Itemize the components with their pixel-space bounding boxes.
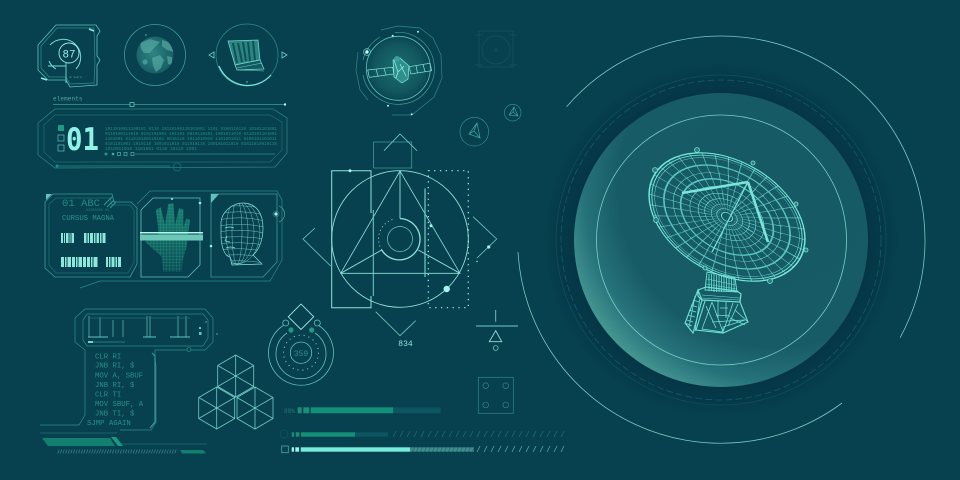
big index number: 01 — [66, 122, 99, 158]
binary text block — [105, 127, 277, 152]
progress steps — [104, 152, 275, 156]
icon: triangle node large — [460, 117, 489, 146]
panel: face scan — [210, 194, 285, 277]
icon: triangle node small — [504, 104, 521, 121]
binary text block: 1010011010 1101001 0110 10110 1001 — [105, 147, 197, 152]
barcode row 2 — [61, 257, 121, 267]
slider rule — [53, 102, 286, 106]
panel: radio telescope radar — [518, 36, 925, 443]
binary text block: 0101101001 1010110 1001011010 011010110 100101011010 01011010010110 — [105, 142, 277, 147]
outer arc lower — [518, 252, 842, 443]
icon: laptop in circle — [209, 24, 287, 86]
satellite — [368, 56, 432, 83]
code listing: JNB TI, $ — [95, 410, 135, 418]
faint crosshair square — [475, 31, 517, 67]
code listing: MOV A, SBUF — [95, 372, 143, 380]
icon: gauge badge 87: on board — [69, 75, 82, 79]
diagram: sacred geometry blueprint — [303, 134, 497, 349]
code listing: JNB RI, $ — [95, 382, 135, 390]
icon: stacked hexagon cubes — [199, 355, 273, 429]
icon: globe — [124, 24, 186, 86]
dial value: 359 — [294, 350, 308, 359]
icon: wireframe hand — [145, 203, 190, 272]
rim bolts — [653, 148, 808, 283]
code listing: JNB RI, $ — [95, 362, 135, 370]
footer bars lower left — [40, 433, 207, 454]
icon: wireframe head — [220, 202, 264, 266]
outer arc upper — [567, 36, 925, 338]
icon: 359 dial — [268, 304, 333, 385]
chart spikes — [88, 316, 190, 342]
house square — [374, 142, 412, 168]
progress bar 1 — [284, 407, 441, 415]
card subtitle: CURSUS MAGNA — [62, 215, 114, 223]
knob — [273, 206, 285, 222]
panel: ID card with barcodes — [45, 194, 137, 277]
code listing: CLR TI — [95, 392, 121, 400]
diagram value: 834 — [398, 340, 413, 349]
selector squares — [58, 125, 64, 151]
label: elements: elements — [53, 96, 83, 102]
icon: stacked symbol — [476, 310, 518, 350]
panel: 01 data readout — [38, 109, 287, 171]
chevrons — [303, 217, 497, 336]
antenna base — [685, 272, 748, 333]
dish reflector — [626, 126, 828, 308]
dotted rectangle — [428, 171, 468, 308]
icon: square with four circles — [478, 377, 513, 413]
card title: 01 ABC — [62, 199, 100, 210]
scan bar — [140, 232, 203, 240]
icon: wireframe radio dish — [626, 126, 828, 333]
icon: gauge badge 87 — [38, 25, 100, 87]
main circle — [332, 171, 468, 307]
left rectangle — [332, 171, 371, 308]
panel: hand scanner — [80, 191, 282, 288]
binary text block: 1011010011100101 0110 10110100110101001 1101 0100110110 10101101001 — [105, 127, 277, 132]
code listing: SJMP AGAIN — [87, 420, 131, 428]
progress bar 3 — [282, 446, 565, 453]
hub rings — [382, 218, 420, 260]
binary text block: 1101001 011010100110101 0010110 1011010010 1101001011 0100101101011 — [105, 137, 277, 142]
gauge value: 87 — [62, 50, 76, 62]
progress bar 2 — [280, 430, 565, 438]
panel: ID card with barcodes: 00000000 00 — [86, 209, 109, 213]
feed struts — [682, 182, 768, 252]
code listing — [87, 354, 144, 428]
barcode row 1 — [61, 233, 106, 243]
code listing: MOV SBUF, A — [95, 401, 144, 409]
icon: satellite scope — [356, 26, 442, 115]
panel: signal chart and code listing — [40, 309, 218, 430]
code listing: CLR RI — [95, 354, 121, 362]
main triangle — [341, 171, 460, 273]
binary text block: 0110100111010 0101101001 101101 0010110101 1001011010 0110101101001 — [105, 132, 277, 137]
progress bar 1: 88% — [284, 408, 295, 415]
